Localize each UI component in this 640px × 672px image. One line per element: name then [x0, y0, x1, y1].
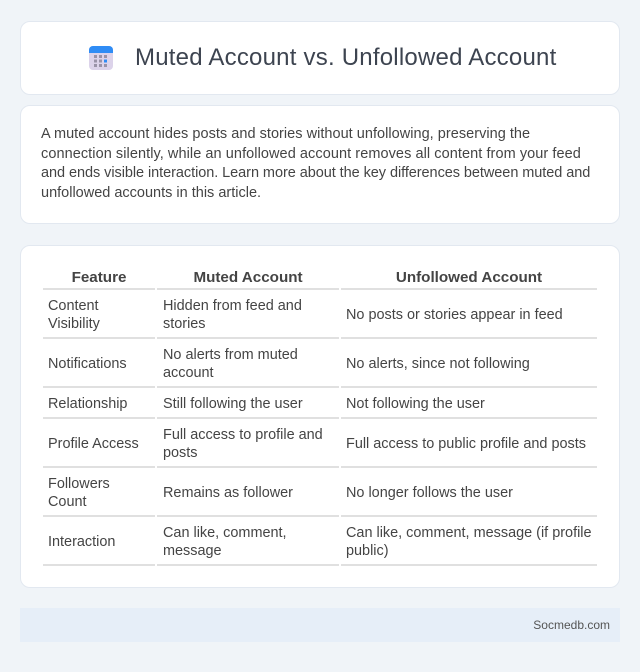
intro paragraph: A muted account hides posts and stories without unfollowing, preserving the	[41, 126, 530, 142]
table rows: Interaction	[48, 534, 115, 550]
table header: Feature	[72, 269, 126, 286]
table rows: Not following the user	[346, 396, 485, 412]
table rows: Full access to profile and	[163, 427, 323, 443]
table rows: Remains as follower	[163, 485, 293, 501]
table header	[72, 269, 542, 286]
table rows: Can like, comment, message (if profile	[346, 525, 592, 541]
table rows: Content	[48, 298, 99, 314]
panel: comparison table	[20, 245, 620, 588]
table rows: posts	[163, 445, 198, 461]
table header: Unfollowed Account	[396, 269, 542, 286]
table rows: No posts or stories appear in feed	[346, 307, 563, 323]
table rows: Visibility	[48, 316, 100, 332]
table rows: stories	[163, 316, 206, 332]
table rows: Still following the user	[163, 396, 303, 412]
table rows: No longer follows the user	[346, 485, 513, 501]
intro paragraph: connection silently, while an unfollowed account removes all content from your feed	[41, 146, 581, 162]
table rows: Profile Access	[48, 436, 139, 452]
intro paragraph: unfollowed accounts in this article.	[41, 184, 261, 200]
table rows: Relationship	[48, 396, 127, 412]
table rows: account	[163, 365, 214, 381]
table rows: Can like, comment,	[163, 525, 287, 541]
table rows: Hidden from feed and	[163, 298, 302, 314]
panel: title card	[20, 21, 620, 95]
table rows: message	[163, 543, 222, 559]
table rows	[43, 288, 597, 566]
table rows: public)	[346, 543, 389, 559]
panel: intro text	[20, 105, 620, 224]
table rows: No alerts, since not following	[346, 356, 530, 372]
table rows: Full access to public profile and posts	[346, 436, 586, 452]
icon: calendar	[89, 46, 113, 70]
intro paragraph	[41, 126, 590, 200]
table rows: Count	[48, 494, 87, 510]
table header: Muted Account	[193, 269, 303, 286]
table rows: No alerts from muted	[163, 347, 298, 363]
title: Muted Account vs. Unfollowed Account	[135, 44, 556, 71]
table rows: Followers	[48, 476, 110, 492]
table rows: Notifications	[48, 356, 127, 372]
footer text: Socmedb.com	[533, 618, 610, 632]
footer bar	[20, 608, 620, 642]
intro paragraph: and ends visible interaction. Learn more about the key differences between muted and	[41, 165, 590, 181]
